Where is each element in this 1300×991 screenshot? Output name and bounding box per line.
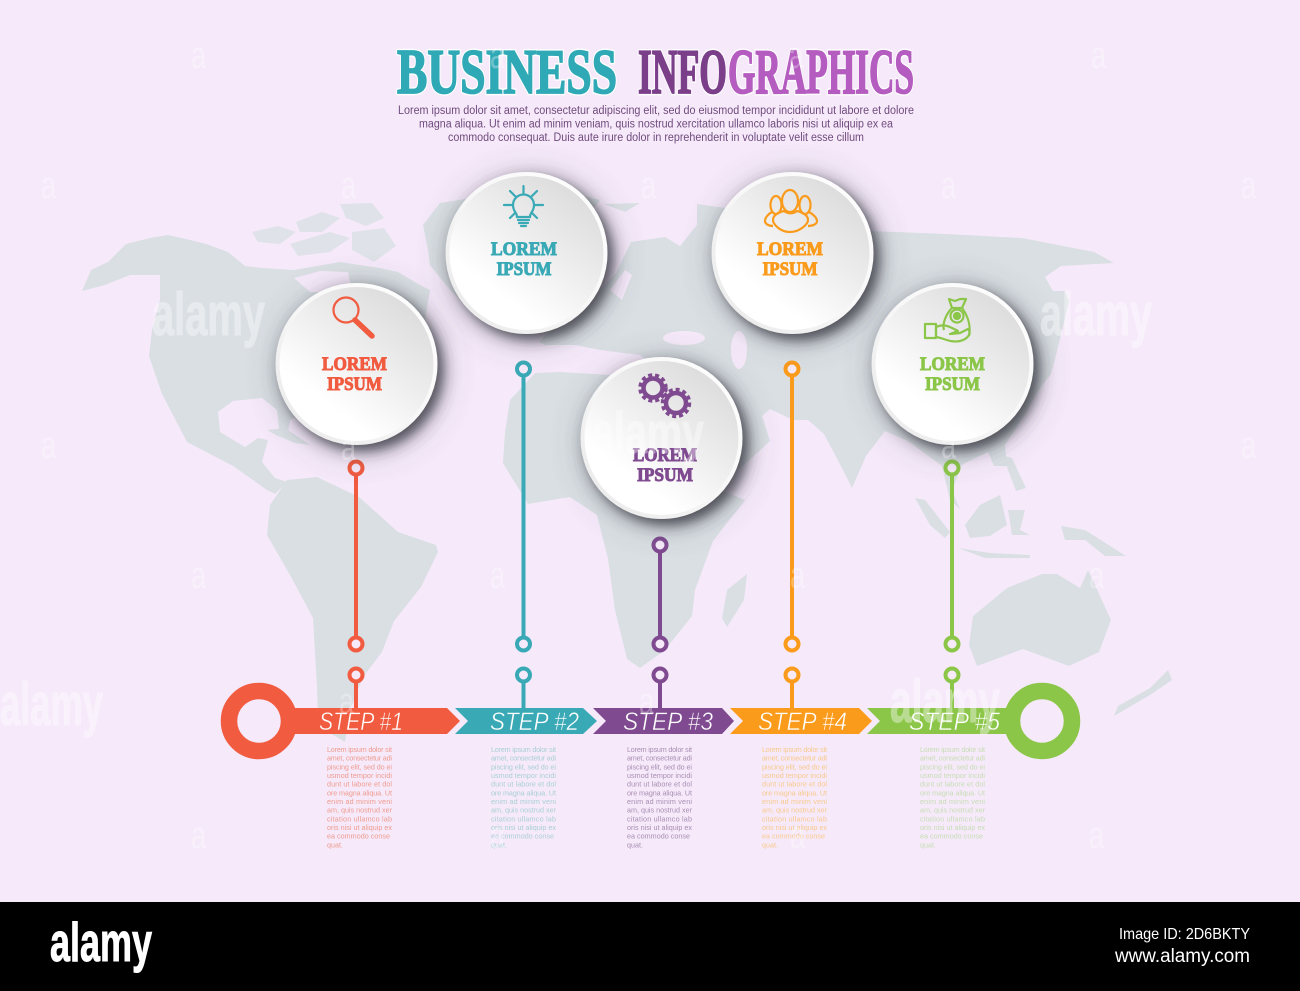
text block: step 2: Lorem ipsum dolor sit xyxy=(491,745,556,754)
watermarks: alamy xyxy=(890,668,1000,735)
text block: step 5: amet, consectetur adi xyxy=(920,754,985,763)
north america xyxy=(82,235,430,494)
watermarks: a xyxy=(790,555,806,597)
text block: step 1: dunt ut labore et dol xyxy=(327,780,392,789)
text block: step 1: ea commodo conse xyxy=(327,832,390,841)
arrow bar: step 2 xyxy=(455,708,597,736)
watermarks: a xyxy=(41,165,57,207)
icon: light bulb xyxy=(504,186,543,226)
text block: step 5 xyxy=(920,745,986,849)
subtitle text xyxy=(398,105,914,144)
label: lorem ipsum xyxy=(920,354,985,395)
circle card 5: money xyxy=(872,283,1034,445)
watermarks: a xyxy=(341,427,357,469)
arrow bar: step 1 with start ring: STEP #1 xyxy=(319,708,403,736)
title: INFO xyxy=(638,36,727,107)
connector: step 3 xyxy=(654,538,666,710)
text block: step 2: enim ad minim veni xyxy=(491,797,556,806)
connector: step 1 xyxy=(350,462,362,710)
greenland xyxy=(423,190,600,320)
circle card 4: team xyxy=(712,172,874,334)
eurasia xyxy=(539,204,1114,509)
watermarks: a xyxy=(1091,35,1107,77)
text block: step 1: am, quis nostrud xer xyxy=(327,806,393,815)
new zealand xyxy=(1114,670,1172,716)
text block: step 4: quat. xyxy=(762,840,778,849)
subtitle text: commodo consequat. Duis aute irure dolor in reprehenderit in voluptate velit esse cillum xyxy=(448,132,864,144)
circle card 2: idea xyxy=(446,172,608,334)
text block: step 3: usmod tempor incidi xyxy=(627,771,692,780)
text block: step 3: quat. xyxy=(627,840,643,849)
text block: step 3: am, quis nostrud xer xyxy=(627,806,693,815)
label: lorem ipsum xyxy=(757,239,823,280)
label: lorem ipsum xyxy=(491,239,557,280)
text block: step 2: usmod tempor incidi xyxy=(491,771,556,780)
label: lorem ipsum: IPSUM xyxy=(327,374,382,395)
svalbard xyxy=(604,203,640,212)
text block: step 1: Lorem ipsum dolor sit xyxy=(327,745,392,754)
website: www.alamy.com xyxy=(1114,946,1250,967)
text block: step 4: oris nisi ut aliquip ex xyxy=(762,823,827,832)
java xyxy=(958,548,1030,558)
watermarks: alamy xyxy=(152,281,265,348)
text block: step 5: am, quis nostrud xer xyxy=(920,806,986,815)
text block: step 4: enim ad minim veni xyxy=(762,797,827,806)
text block: step 3: Lorem ipsum dolor sit xyxy=(627,745,692,754)
label: lorem ipsum: IPSUM xyxy=(637,465,693,486)
sulawesi xyxy=(1008,510,1030,535)
image id: Image ID: 2D6BKTY xyxy=(1119,926,1250,943)
label: lorem ipsum: LOREM xyxy=(491,239,557,260)
text block: step 5: oris nisi ut aliquip ex xyxy=(920,823,985,832)
watermarks: a xyxy=(191,35,207,77)
text block: step 5: piscing elit, sed do ei xyxy=(920,762,985,771)
arrow bar: step 1 with start ring xyxy=(229,691,460,751)
label: lorem ipsum xyxy=(322,354,387,395)
icon: magnifier xyxy=(334,298,372,336)
watermarks: alamy xyxy=(592,401,704,466)
text block: step 1: piscing elit, sed do ei xyxy=(327,762,392,771)
arrow bar: step 5 with end ring xyxy=(867,691,1072,751)
text block: step 2: citation ullamco lab xyxy=(491,814,556,823)
watermarks: a xyxy=(490,35,506,77)
watermarks: a xyxy=(490,815,506,857)
title: BUSINESS xyxy=(397,36,617,107)
australia xyxy=(969,570,1111,666)
label: lorem ipsum: LOREM xyxy=(633,445,697,466)
footer bar xyxy=(0,902,1300,991)
label: lorem ipsum: IPSUM xyxy=(496,259,552,280)
icon: gears xyxy=(640,375,690,416)
watermarks: a xyxy=(1089,815,1105,857)
watermarks: a xyxy=(789,35,805,77)
text block: step 2: piscing elit, sed do ei xyxy=(491,762,556,771)
icon: money bag in hand xyxy=(925,299,970,341)
text block: step 3: ore magna aliqua. Ut xyxy=(627,788,692,797)
subtitle text: Lorem ipsum dolor sit amet, consectetur adipiscing elit, sed do eiusmod tempor incididunt ut labore et dolore xyxy=(398,105,914,117)
text block: step 5: quat. xyxy=(920,840,936,849)
new guinea xyxy=(1061,526,1126,556)
text block: step 3: piscing elit, sed do ei xyxy=(627,762,692,771)
watermarks: a xyxy=(790,292,806,334)
text block: step 3: citation ullamco lab xyxy=(627,814,692,823)
connector: step 2 xyxy=(517,362,530,710)
watermarks: a xyxy=(790,815,806,857)
text block: step 5: dunt ut labore et dol xyxy=(920,780,985,789)
borneo xyxy=(965,495,1007,538)
label: lorem ipsum: LOREM xyxy=(757,239,823,260)
arrow bar: step 4 xyxy=(730,708,872,736)
text block: step 1: citation ullamco lab xyxy=(327,814,392,823)
text block: step 1: oris nisi ut aliquip ex xyxy=(327,823,392,832)
text block: step 4: dunt ut labore et dol xyxy=(762,780,827,789)
arrow bar: step 2: STEP #2 xyxy=(490,708,579,736)
text block: step 2: ea commodo conse xyxy=(491,832,554,841)
text block: step 2: oris nisi ut aliquip ex xyxy=(491,823,556,832)
text block: step 5: ea commodo conse xyxy=(920,832,983,841)
text block: step 5: Lorem ipsum dolor sit xyxy=(920,745,985,754)
watermarks: a xyxy=(641,165,657,207)
title xyxy=(397,36,914,107)
south america xyxy=(267,477,438,742)
icon: people xyxy=(765,190,817,232)
arrow bar: step 4: STEP #4 xyxy=(758,708,847,736)
text block: step 4: piscing elit, sed do ei xyxy=(762,762,827,771)
watermarks: a xyxy=(1241,425,1257,467)
africa xyxy=(503,372,745,668)
inland seas xyxy=(294,270,747,369)
text block: step 4: citation ullamco lab xyxy=(762,814,827,823)
text block: step 5: citation ullamco lab xyxy=(920,814,985,823)
watermarks: a xyxy=(191,555,207,597)
cuba xyxy=(267,428,310,445)
watermarks: a xyxy=(639,681,655,723)
title: GRAPHICS xyxy=(728,36,914,107)
watermarks: a xyxy=(191,815,207,857)
text block: step 5: enim ad minim veni xyxy=(920,797,985,806)
label: lorem ipsum: IPSUM xyxy=(925,374,980,395)
watermarks: a xyxy=(941,425,957,467)
text block: step 5: ore magna aliqua. Ut xyxy=(920,788,985,797)
watermarks: a xyxy=(941,165,957,207)
text block: step 4: ea commodo conse xyxy=(762,832,825,841)
text block: step 1: ore magna aliqua. Ut xyxy=(327,788,392,797)
connector: step 4 xyxy=(786,362,798,710)
text block: step 3: ea commodo conse xyxy=(627,832,690,841)
circle card 3: settings xyxy=(580,357,742,519)
title: BUSINESS xyxy=(397,36,617,107)
label: lorem ipsum: LOREM xyxy=(920,354,985,375)
text block: step 4: ore magna aliqua. Ut xyxy=(762,788,827,797)
text block: step 1 xyxy=(327,745,393,849)
text block: step 3: dunt ut labore et dol xyxy=(627,780,692,789)
text block: step 3: oris nisi ut aliquip ex xyxy=(627,823,692,832)
watermarks: a xyxy=(1089,555,1105,597)
philippines xyxy=(1004,456,1026,491)
text block: step 4: amet, consectetur adi xyxy=(762,754,827,763)
text block: step 2 xyxy=(491,745,557,849)
arrow bar: step 5 with end ring: STEP #5 xyxy=(909,708,1000,736)
watermarks: a xyxy=(490,555,506,597)
watermarks: a xyxy=(1241,165,1257,207)
text block: step 1: enim ad minim veni xyxy=(327,797,392,806)
text block: step 2: quat. xyxy=(491,840,507,849)
madagascar xyxy=(722,574,747,627)
label: lorem ipsum: IPSUM xyxy=(762,259,818,280)
watermarks: alamy xyxy=(1040,281,1152,348)
circle card 1: search xyxy=(276,283,438,445)
text block: step 4: Lorem ipsum dolor sit xyxy=(762,745,827,754)
watermarks: a xyxy=(341,165,357,207)
text block: step 2: ore magna aliqua. Ut xyxy=(491,788,556,797)
text block: step 1: amet, consectetur adi xyxy=(327,754,392,763)
watermarks: alamy xyxy=(0,671,103,738)
text block: step 5: usmod tempor incidi xyxy=(920,771,985,780)
footer logo: alamy xyxy=(50,911,152,973)
text block: step 2: am, quis nostrud xer xyxy=(491,806,557,815)
world map xyxy=(82,190,1172,742)
text block: step 4: am, quis nostrud xer xyxy=(762,806,828,815)
text block: step 4: usmod tempor incidi xyxy=(762,771,827,780)
sumatra xyxy=(915,498,950,538)
text block: step 2: amet, consectetur adi xyxy=(491,754,556,763)
label: lorem ipsum: LOREM xyxy=(322,354,387,375)
text block: step 2: dunt ut labore et dol xyxy=(491,780,556,789)
text block: step 1: usmod tempor incidi xyxy=(327,771,392,780)
label: lorem ipsum xyxy=(633,445,697,486)
subtitle text: magna aliqua. Ut enim ad minim veniam, quis nostrud xercitation ullamco laboris nisi ut aliquip ex ea xyxy=(419,118,894,130)
title: INFO xyxy=(638,36,727,107)
text block: step 3: amet, consectetur adi xyxy=(627,754,692,763)
text block: step 1: quat. xyxy=(327,840,343,849)
arrow bar: step 3: STEP #3 xyxy=(623,708,713,736)
text block: step 4 xyxy=(762,745,828,849)
connector: step 5 xyxy=(946,462,958,710)
watermarks: a xyxy=(41,425,57,467)
title: GRAPHICS xyxy=(728,36,914,107)
arctic islands xyxy=(252,203,396,262)
watermarks: a xyxy=(339,681,355,723)
text block: step 3 xyxy=(627,745,693,849)
text block: step 3: enim ad minim veni xyxy=(627,797,692,806)
